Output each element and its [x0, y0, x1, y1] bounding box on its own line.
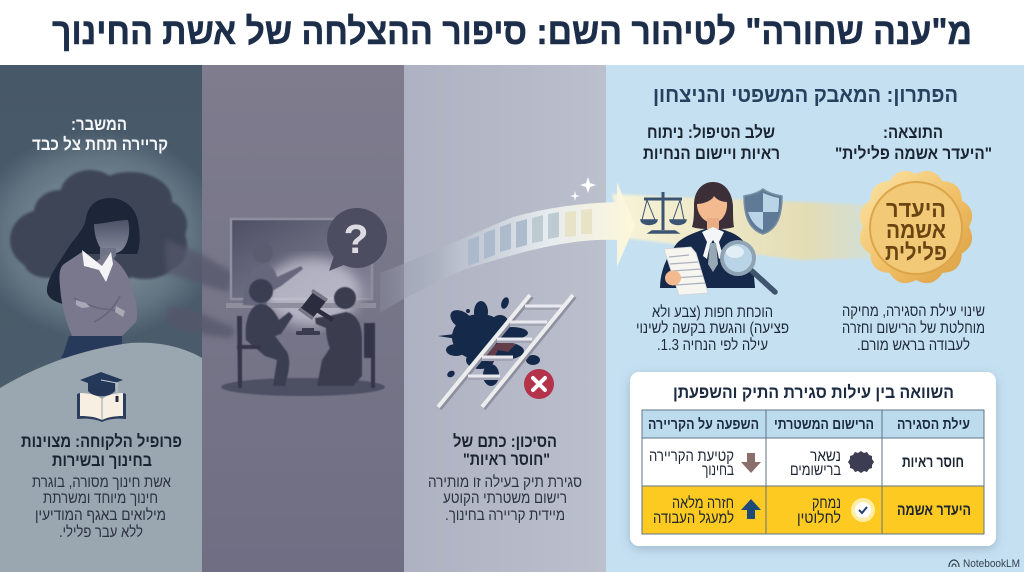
lower curve background — [0, 343, 202, 572]
text: result — [842, 303, 985, 354]
heading: treatment stage: ראיות ויישום הנחיות — [643, 144, 780, 163]
row: lack of evidence: חוסר ראיות — [902, 454, 964, 471]
icon: gavel — [296, 289, 333, 335]
table header — [648, 417, 970, 433]
heading: treatment stage: שלב הטיפול: ניתוח — [647, 123, 775, 142]
heading: risk: "חוסר ראיות" — [463, 450, 550, 469]
panel: risk — [404, 65, 606, 572]
table header: עילת הסגירה — [897, 417, 970, 433]
row: lack of evidence: נשאר — [810, 448, 841, 465]
panel: crisis — [0, 65, 223, 572]
icon: scales of justice — [641, 192, 686, 233]
row: lack of evidence: ברישומים — [790, 462, 841, 479]
text: risk: סגירת תיק בעילה זו מותירה — [428, 474, 582, 491]
heading: result — [835, 123, 992, 163]
document — [664, 247, 708, 295]
card heading: השוואה בין עילות סגירת התיק והשפעתן — [673, 382, 954, 402]
text: risk: מיידית קריירה בחינוך. — [445, 507, 565, 524]
heading: solution: הפתרון: המאבק המשפטי והניצחון — [653, 83, 958, 107]
icon: ink stain and broken ladder — [438, 295, 574, 408]
row: lack of evidence: קטיעת הקריירה — [649, 448, 734, 465]
comparison card — [630, 372, 996, 546]
icon: graduation cap on book — [77, 372, 126, 422]
text: risk — [428, 474, 582, 524]
icon: sparkles — [570, 177, 596, 201]
panel: classroom — [165, 65, 404, 572]
seal text: אשמה — [886, 217, 946, 243]
heading: risk: הסיכון: כתם של — [453, 432, 557, 451]
icon: lawyer — [660, 182, 775, 295]
text: client profile: ללא עבר פלילי. — [59, 524, 143, 541]
heading: client profile: פרופיל הלקוחה: מצוינות — [21, 432, 182, 451]
text: result: שינוי עילת הסגירה, מחיקה — [842, 303, 985, 320]
icon: question bubble — [327, 208, 387, 271]
figure: troubled woman — [47, 198, 140, 358]
row: lack of evidence: בחינוך — [702, 462, 734, 479]
row: no guilt: חזרה מלאה — [672, 495, 734, 512]
text: client profile — [32, 474, 171, 541]
heading: result: "היעדר אשמה פלילית" — [835, 144, 992, 163]
text: client profile: מילואים באגף המודיעין — [35, 507, 166, 524]
heading: client profile — [21, 432, 182, 470]
row: no guilt — [653, 495, 971, 527]
arrow: bridge to solution — [380, 177, 635, 313]
magnifier — [722, 242, 775, 292]
icon: classroom scene — [221, 208, 387, 396]
seal text — [885, 196, 947, 265]
text: treatment stage — [636, 304, 789, 354]
table — [642, 410, 984, 534]
text: client profile: אשת חינוך מסורה, בוגרת — [32, 474, 171, 491]
text: risk: רישום משטרתי הקוטע — [443, 490, 567, 507]
heading: crisis — [32, 114, 168, 154]
seal text: פלילית — [885, 239, 947, 265]
row: no guilt: היעדר אשמה — [897, 502, 971, 519]
text: result: מוחלטת של הרישום וחזרה — [842, 320, 985, 337]
panel: solution — [606, 65, 1024, 572]
icon: gold seal — [860, 171, 972, 283]
row: no guilt: נמחק — [812, 495, 841, 512]
light beam — [612, 194, 875, 260]
text: treatment stage: עילה לפי הנחיה 1.3. — [657, 337, 768, 354]
smoke trails — [165, 240, 235, 338]
table header: הרישום המשטרתי — [774, 417, 874, 433]
text: client profile: חינוך מיוחד ומשרתת — [43, 490, 158, 507]
heading: treatment stage — [643, 123, 780, 163]
text: treatment stage: הוכחת חפות (צבע ולא — [652, 304, 773, 321]
icon: dark cloud — [10, 170, 187, 282]
heading: crisis: המשבר: — [71, 114, 127, 134]
icon: question bubble: ? — [343, 216, 369, 262]
seal text: היעדר — [886, 196, 946, 222]
row: no guilt: למעגל העבודה — [653, 510, 734, 527]
row: lack of evidence — [649, 448, 964, 479]
text: result: לעבודה בראש מורם. — [857, 337, 970, 354]
table header: השפעה על הקריירה — [648, 417, 759, 433]
row: no guilt: לחלוטין — [797, 510, 841, 527]
heading: crisis: קריירה תחת צל כבד — [32, 134, 168, 154]
heading: client profile: בחינוך ובשירות — [52, 451, 152, 470]
heading: result: התוצאה: — [883, 123, 943, 142]
text: treatment stage: פציעה) והגשת בקשה לשינוי — [636, 320, 789, 337]
heading: risk — [453, 432, 557, 469]
icon: shield — [744, 189, 782, 234]
icon: red x badge — [524, 369, 554, 399]
logo: NotebookLM: NotebookLM — [963, 558, 1020, 570]
